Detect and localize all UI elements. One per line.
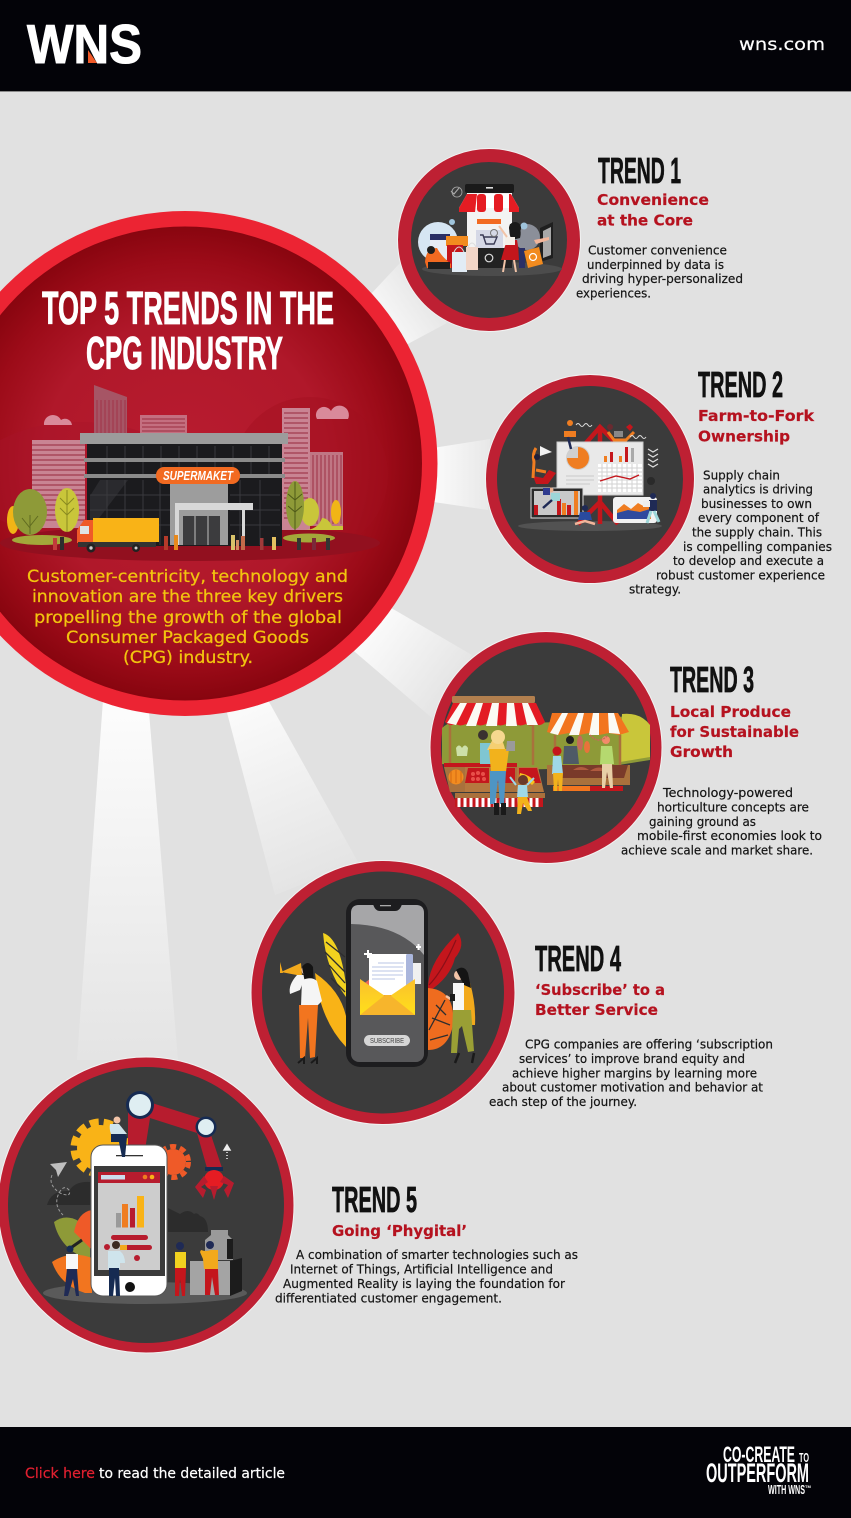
trend 1 text: underpinned by data is xyxy=(587,258,724,272)
paper plane xyxy=(50,1162,67,1177)
trend 4 text: about customer motivation and behavior at xyxy=(502,1081,763,1095)
trend 5 text: A combination of smarter technologies such as xyxy=(296,1248,578,1262)
trend 1 text: driving hyper-personalized xyxy=(582,272,743,286)
call to action: Click here xyxy=(25,1466,95,1482)
leaves behind phone xyxy=(54,1218,90,1260)
icon: subscribe phone xyxy=(280,899,475,1067)
clouds xyxy=(44,415,72,425)
trend 3 text: achieve scale and market share. xyxy=(621,844,813,858)
trend 5 text xyxy=(275,1248,578,1305)
trend 3 subtitle: for Sustainable xyxy=(670,723,799,741)
trend 1 subtitle: Convenience xyxy=(597,191,709,209)
title: TOP 5 TRENDS IN THE xyxy=(42,282,334,334)
people xyxy=(64,1116,242,1296)
trend 2 text: every component of xyxy=(698,511,820,525)
gears xyxy=(77,1125,123,1171)
intro text: propelling the growth of the global xyxy=(34,608,342,627)
trend 2 subtitle: Ownership xyxy=(698,428,790,446)
trend 4 subtitle xyxy=(535,981,665,1019)
trend 5 text: differentiated customer engagement. xyxy=(275,1291,502,1305)
trend 2 text: to develop and execute a xyxy=(673,554,824,568)
title: CPG INDUSTRY xyxy=(86,327,283,379)
trend 2 text: Supply chain xyxy=(703,468,780,482)
tagline logo: CO-CREATE xyxy=(723,1442,795,1467)
trend 1 text: experiences. xyxy=(576,286,651,300)
delivery truck xyxy=(77,518,159,552)
trend 1 subtitle xyxy=(597,191,709,230)
trend 1 text: Customer convenience xyxy=(588,244,727,258)
trend 1 text xyxy=(576,244,743,300)
trend 5 circle xyxy=(0,1057,294,1353)
trend 3 heading: TREND 3 xyxy=(670,659,754,700)
icon: supply chain analytics xyxy=(518,420,662,531)
trend 2 subtitle: Farm-to-Fork xyxy=(698,407,815,425)
trend 2 text xyxy=(629,468,832,597)
trend 3 text: gaining ground as xyxy=(649,815,756,829)
trend 3 subtitle: Growth xyxy=(670,743,733,761)
intro text: (CPG) industry. xyxy=(123,648,253,667)
tagline logo: WITH WNS xyxy=(768,1482,805,1497)
trend 2 heading: TREND 2 xyxy=(698,364,783,405)
light rays from main circle to trends xyxy=(77,263,490,1060)
trend 3 text xyxy=(621,786,822,858)
trend 3 text: mobile-first economies look to xyxy=(637,829,822,843)
trend 3 circle xyxy=(430,632,662,864)
trend 2 text: the supply chain. This xyxy=(692,526,822,540)
trend 3 subtitle: Local Produce xyxy=(670,703,791,721)
trend 4 subtitle: ‘Subscribe’ to a xyxy=(535,981,665,999)
trend 2 text: robust customer experience xyxy=(656,568,825,582)
intro text: innovation are the three key drivers xyxy=(32,587,343,606)
trend 5 subtitle: Going ‘Phygital’ xyxy=(332,1222,467,1240)
background towers xyxy=(32,385,343,530)
trend 4 text: each step of the journey. xyxy=(489,1095,637,1109)
trend 5 text: Internet of Things, Artificial Intelligence and xyxy=(290,1262,553,1276)
intro text: Consumer Packaged Goods xyxy=(66,628,309,647)
envelope xyxy=(360,954,421,1015)
intro text xyxy=(27,567,348,667)
tagline logo: TM xyxy=(805,1484,811,1489)
trend 4 circle xyxy=(251,860,515,1124)
trend 1 circle xyxy=(398,148,580,332)
panel: trend 2 xyxy=(486,364,832,597)
subscribe button: SUBSCRIBE xyxy=(370,1038,404,1045)
stall crates xyxy=(444,763,517,767)
intro text: Customer-centricity, technology and xyxy=(27,567,348,586)
trend 1 heading: TREND 1 xyxy=(598,150,681,191)
tagline logo: TO xyxy=(799,1450,809,1465)
trend 3 text: Technology-powered xyxy=(662,786,793,800)
website address: wns.com xyxy=(739,35,825,55)
trend 4 heading: TREND 4 xyxy=(535,938,621,979)
trees and bushes xyxy=(7,506,19,534)
trend 4 text xyxy=(489,1038,773,1109)
robot arm xyxy=(128,1098,222,1168)
woman with phone xyxy=(446,968,475,1063)
trend 3 text: horticulture concepts are xyxy=(657,800,809,814)
trend 1 subtitle: at the Core xyxy=(597,212,693,230)
trend 2 circle xyxy=(486,374,694,584)
subscribe button xyxy=(364,1035,410,1046)
icon: local market stalls xyxy=(442,696,650,815)
trend 4 text: achieve higher margins by learning more xyxy=(512,1066,757,1080)
header bar xyxy=(0,0,851,92)
icon: phygital factory xyxy=(43,1091,247,1304)
store building xyxy=(87,444,282,546)
trend 2 text: businesses to own xyxy=(701,497,812,511)
woman with megaphone xyxy=(280,962,322,1064)
store sign: SUPERMAKET xyxy=(163,468,234,483)
tagline logo xyxy=(706,1442,811,1497)
illustration: supermarket xyxy=(0,385,388,561)
market people xyxy=(456,730,614,815)
boxes xyxy=(205,1230,233,1260)
footer bar xyxy=(0,1427,851,1518)
trend 4 subtitle: Better Service xyxy=(535,1001,658,1019)
trend 3 subtitle xyxy=(670,703,799,761)
panel: trend 5 xyxy=(0,1057,578,1353)
trend 5 heading: TREND 5 xyxy=(332,1179,417,1220)
trend 5 text: Augmented Reality is laying the foundation for xyxy=(283,1277,565,1291)
panel: trend 1 xyxy=(398,148,743,332)
panel: trend 4 xyxy=(251,860,773,1124)
panel: main circle xyxy=(0,211,438,716)
trend 4 text: services’ to improve brand equity and xyxy=(519,1052,745,1066)
panel: trend 3 xyxy=(430,632,822,864)
trend 2 text: strategy. xyxy=(629,583,681,597)
WNS logo: WNS xyxy=(27,13,142,75)
icon: online shopping xyxy=(418,184,562,276)
shoppers xyxy=(53,535,330,550)
trend 2 text: is compelling companies xyxy=(683,540,832,554)
trend 4 text: CPG companies are offering ‘subscription xyxy=(525,1038,773,1052)
trend 2 text: analytics is driving xyxy=(703,483,813,497)
title xyxy=(42,282,334,379)
trend 2 subtitle xyxy=(698,407,815,446)
call to action: to read the detailed article xyxy=(99,1466,285,1482)
phone xyxy=(91,1145,167,1296)
